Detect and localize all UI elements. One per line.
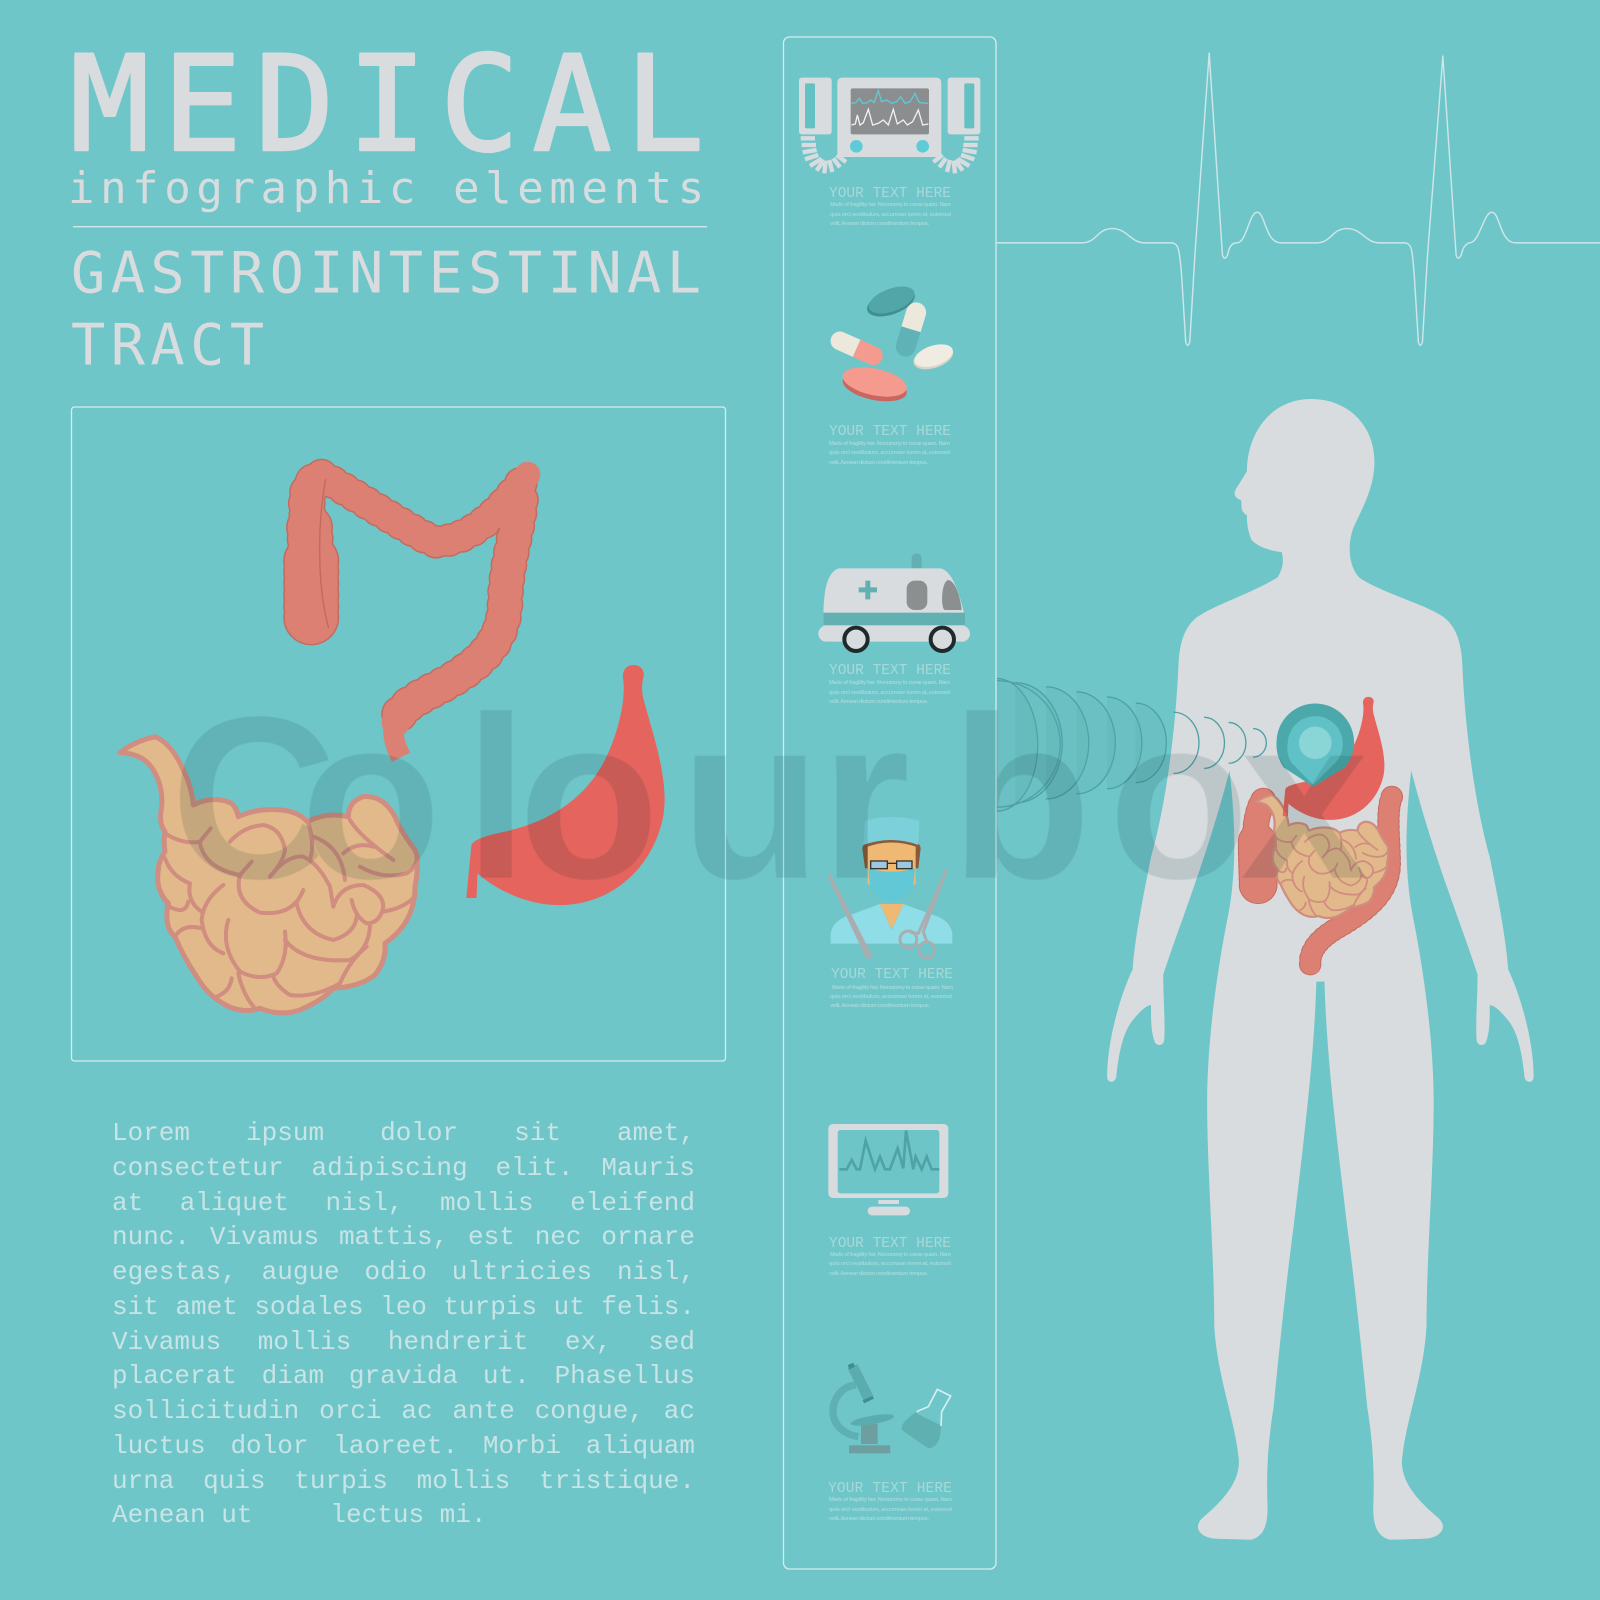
text block: caption 1: velit. Aenean dictum condimentum tempus.	[830, 221, 929, 227]
sonar arcs from panel to pin	[997, 679, 1266, 811]
text block: caption 2: velit. Aenean dictum condimentum tempus.	[829, 460, 928, 466]
panel: vertical icon column	[784, 37, 996, 1569]
text block: caption 4: quis orci vestibulum, accumsan lorem at, euismod	[830, 994, 953, 1000]
small stomach on body	[1283, 697, 1384, 820]
text block: caption 3: Made of fragility her. Nonummy in curae quam. Nam	[829, 680, 950, 686]
icon: location pin	[1276, 704, 1354, 787]
text block: caption 4	[830, 967, 953, 1009]
text block: lorem ipsum paragraph: at aliquet nisl, mollis eleifend	[112, 1188, 695, 1218]
text block: lorem ipsum paragraph: sollicitudin orci ac ante congue, ac	[112, 1396, 695, 1426]
text block: lorem ipsum paragraph: placerat diam gravida ut. Phasellus	[112, 1361, 695, 1391]
text block: caption 5	[829, 1236, 952, 1277]
text block: caption 2: Made of fragility her. Nonummy in curae quam. Nam	[829, 441, 950, 447]
text block: caption 4: Made of fragility her. Nonummy in curae quam. Nam	[832, 985, 953, 991]
small intestine on body	[1256, 795, 1388, 918]
text block: lorem ipsum paragraph: Aenean ut lectus mi.	[112, 1500, 486, 1530]
text block: caption 1: YOUR TEXT HERE	[829, 186, 951, 202]
panel: organ illustration box	[72, 407, 726, 1061]
text block: lorem ipsum paragraph	[112, 1118, 695, 1530]
icon: heart monitor	[828, 1124, 948, 1215]
text block: caption 5: velit. Aenean dictum condimentum tempus.	[829, 1271, 928, 1277]
text block: lorem ipsum paragraph: nunc. Vivamus mattis, est nec ornare	[112, 1222, 695, 1252]
large small-intestine illustration	[120, 737, 417, 1013]
text block: lorem ipsum paragraph: urna quis turpis mollis tristique.	[112, 1466, 695, 1496]
text block: lorem ipsum paragraph: sit amet sodales leo turpis ut felis.	[112, 1292, 695, 1322]
text block: caption 3: YOUR TEXT HERE	[829, 663, 951, 679]
text block: caption 6: velit. Aenean dictum condimentum tempus.	[829, 1516, 929, 1522]
human body silhouette	[1107, 399, 1534, 1540]
text block: lorem ipsum paragraph: Vivamus mollis hendrerit ex, sed	[112, 1326, 695, 1356]
text block: lorem ipsum paragraph: luctus dolor laoreet. Morbi aliquam	[112, 1431, 695, 1461]
text block: caption 3: quis orci vestibulum, accumsan lorem at, euismod	[829, 690, 951, 696]
title: MEDICAL: MEDICAL	[70, 28, 717, 182]
text block: caption 1: Made of fragility her. Nonummy in curae quam. Nam	[830, 202, 951, 208]
icon: microscope and flask	[833, 1363, 951, 1453]
chart: ECG heartbeat line	[997, 53, 1600, 345]
icon: defibrillator	[799, 78, 980, 173]
watermark: Colourbox	[170, 669, 1369, 928]
subtitle: infographic elements: infographic elements	[68, 163, 710, 214]
text block: lorem ipsum paragraph: Lorem ipsum dolor sit amet,	[112, 1118, 695, 1148]
heading: gastrointestinal tract: GASTROINTESTINAL	[71, 240, 706, 306]
text block: caption 5: YOUR TEXT HERE	[829, 1236, 951, 1252]
text block: caption 2: quis orci vestibulum, accumsan lorem at, euismod	[829, 450, 951, 456]
text block: caption 6: quis orci vestibulum, accumsan lorem at, euismod	[829, 1507, 953, 1513]
text block: caption 1: quis orci vestibulum, accumsan lorem at, euismod	[830, 212, 952, 218]
text block: caption 5: Made of fragility her. Nonummy in curae quam. Nam	[830, 1252, 951, 1258]
icon: ambulance	[818, 553, 970, 651]
icon: pills	[828, 281, 956, 406]
large stomach illustration	[466, 665, 665, 905]
heading: gastrointestinal tract	[71, 240, 706, 378]
text block: lorem ipsum paragraph: egestas, augue odio ultricies nisl,	[112, 1257, 695, 1287]
small colon on body	[1255, 797, 1392, 973]
text block: caption 3: velit. Aenean dictum condimentum tempus.	[829, 699, 928, 705]
heading: gastrointestinal tract: TRACT	[71, 312, 270, 378]
text block: caption 1	[829, 186, 952, 227]
text block: caption 6: YOUR TEXT HERE	[828, 1481, 952, 1497]
large colon illustration	[307, 474, 528, 757]
icon: surgeon	[827, 817, 952, 959]
text block: caption 4: velit. Aenean dictum condimentum tempus.	[830, 1003, 930, 1009]
text block: caption 6: Made of fragility her. Nonummy in curae quam. Nam	[829, 1497, 952, 1503]
text block: caption 3	[829, 663, 951, 705]
text block: caption 5: quis orci vestibulum, accumsan lorem at, euismod	[829, 1261, 952, 1267]
text block: caption 4: YOUR TEXT HERE	[831, 967, 953, 983]
text block: caption 2	[829, 424, 951, 466]
text block: caption 6	[828, 1481, 953, 1522]
text block: lorem ipsum paragraph: consectetur adipiscing elit. Mauris	[112, 1153, 695, 1183]
text block: caption 2: YOUR TEXT HERE	[829, 424, 951, 440]
